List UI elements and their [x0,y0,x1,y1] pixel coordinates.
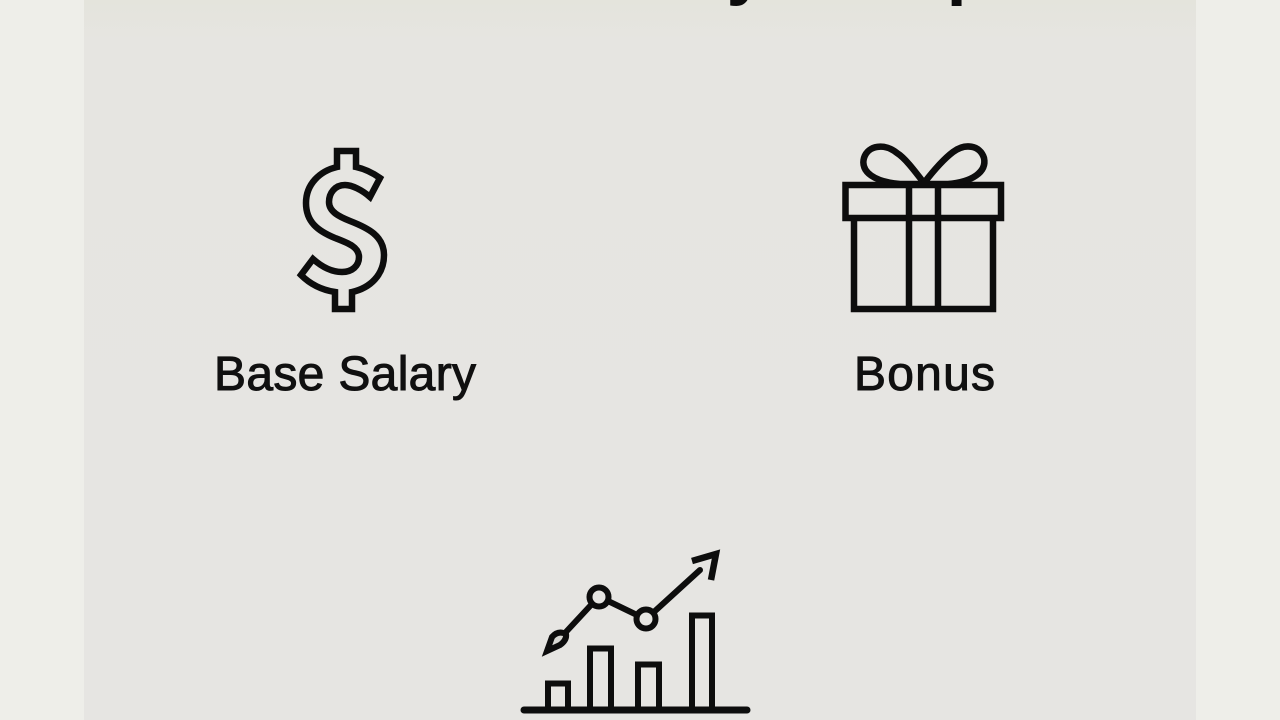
chart baseline [524,706,747,714]
icon: gift box [846,146,1001,309]
chart bars [548,616,712,710]
icon: growth chart [524,554,747,710]
label: Base Salary: Base Salary [214,348,476,401]
icon: dollar sign [301,151,384,309]
trend line with arrow [547,554,716,651]
label: Bonus: Bonus [854,348,995,401]
